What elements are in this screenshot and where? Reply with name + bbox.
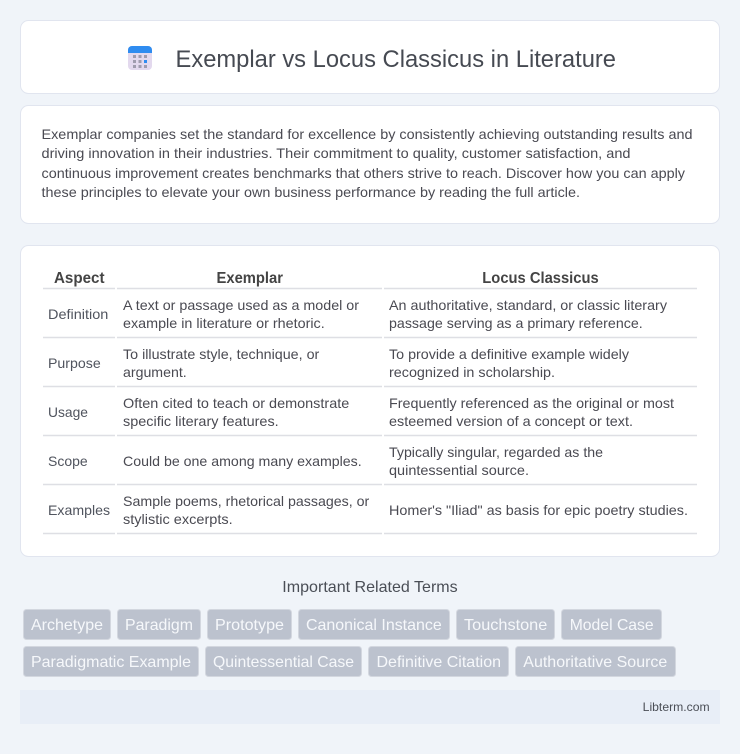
footer credit: Libterm.com [643,700,710,714]
table row: examples [43,493,697,534]
tag: Prototype [208,610,292,640]
table row: examples: stylistic excerpts. [123,511,233,527]
table row: usage: Often cited to teach or demonstrate [123,395,350,411]
icon: calendar [128,46,152,70]
table row: examples: Sample poems, rhetorical passages, or [123,493,370,509]
text block: introduction [42,126,692,200]
tag: Paradigmatic Example: Paradigmatic Example [31,654,191,671]
tag: Canonical Instance: Canonical Instance [306,617,442,634]
panel: introduction paragraph [20,106,720,224]
tag: Touchstone: Touchstone [464,617,547,634]
table row: purpose [43,346,697,386]
tag: Canonical Instance [298,610,450,640]
tag: Touchstone [456,610,554,640]
table row: scope: Scope [48,453,88,469]
table row: definition: An authoritative, standard, or classic literary [389,297,667,313]
tag: Model Case: Model Case [570,617,654,634]
table header row: Locus Classicus [482,270,599,287]
table row: usage: Usage [48,404,88,420]
text block: introduction: continuous improvement creates benchmarks that others strive to reach. Discover how you can apply [42,165,685,181]
table header row [43,270,697,288]
table row: examples: Homer's "Iliad" as basis for epic poetry studies. [389,502,688,518]
table row: usage: specific literary features. [123,413,279,429]
table row: scope: Could be one among many examples. [123,453,362,469]
table row: purpose: To illustrate style, technique, or [123,346,320,362]
tag: Paradigm [118,610,200,640]
table row: scope [43,444,697,484]
tag: Quintessential Case: Quintessential Case [213,654,354,671]
text block: introduction: driving innovation in their industries. Their commitment to quality, customer satisfaction, and [42,145,630,161]
table header row: Aspect [54,270,104,287]
table row: definition: A text or passage used as a model or [123,297,359,313]
table row: usage: Frequently referenced as the original or most [389,395,674,411]
table row: scope: quintessential source. [389,462,529,478]
tag: Paradigmatic Example [24,646,198,676]
tag: Authoritative Source: Authoritative Source [523,654,667,671]
panel: related term tags [24,610,676,676]
table row: definition: example in literature or rhetoric. [123,315,325,331]
tag: Paradigm: Paradigm [125,617,193,634]
text block: introduction: Exemplar companies set the standard for excellence by consistently achieving outstanding results and [42,126,692,142]
title: Exemplar vs Locus Classicus in Literature [176,46,616,73]
tag: Model Case [562,610,662,640]
table row: usage: esteemed version of a concept or text. [389,413,633,429]
tag: Quintessential Case [206,646,362,676]
table row: definition: passage serving as a primary reference. [389,315,643,331]
tag: Archetype [24,610,110,640]
table row: scope: Typically singular, regarded as the [389,444,603,460]
panel: comparison table [20,246,720,556]
table row: purpose: recognized in scholarship. [389,364,555,380]
panel: title header [20,20,720,94]
table row: usage [43,395,697,436]
table header row: Exemplar [216,270,283,287]
table row: purpose: argument. [123,364,187,380]
table row: purpose: Purpose [48,355,101,371]
table row: definition [43,297,697,338]
heading: important related terms: Important Related Terms [282,579,458,596]
tag: Authoritative Source [516,646,676,676]
footer [20,690,720,724]
table row: examples: Examples [48,502,110,518]
table row: purpose: To provide a definitive example widely [389,346,629,362]
tag: Prototype: Prototype [215,617,284,634]
table row: definition: Definition [48,306,108,322]
tag: Archetype: Archetype [31,617,103,634]
tag: Definitive Citation: Definitive Citation [376,654,501,671]
tag: Definitive Citation [368,646,508,676]
text block: introduction: these principles to elevate your own business performance by reading the full article. [42,184,580,200]
